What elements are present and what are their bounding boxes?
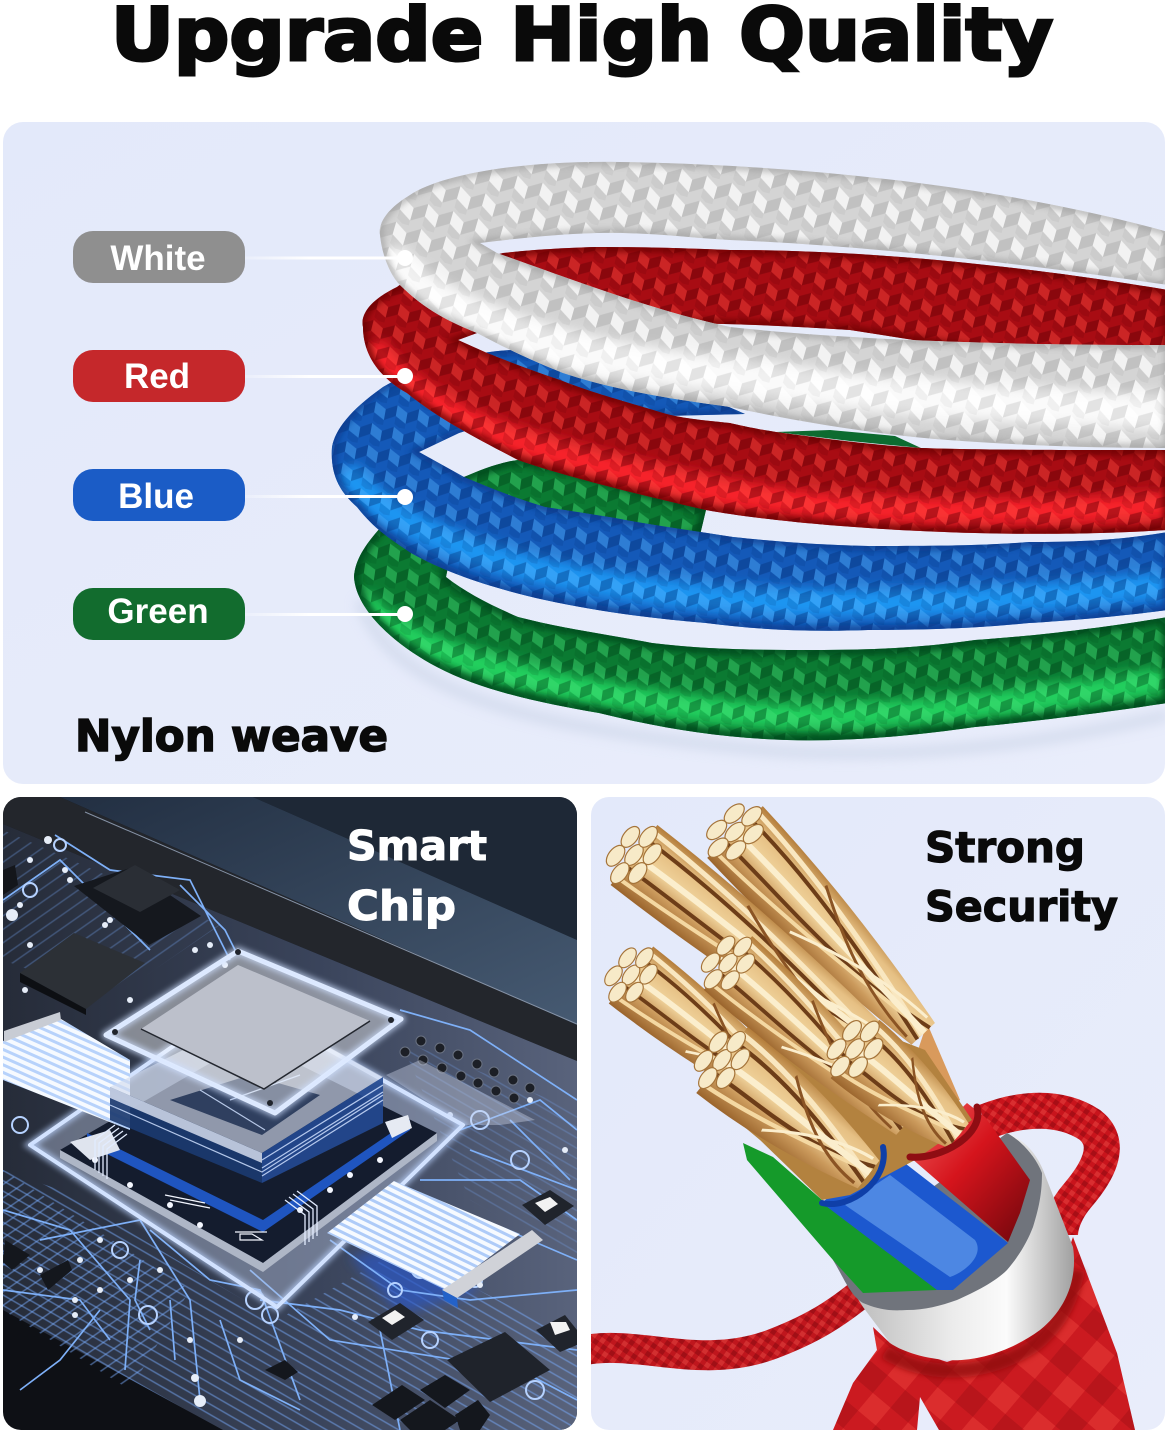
icon: dot matrix components	[400, 1036, 535, 1103]
label: Red	[73, 350, 245, 402]
icon: right glass tint	[386, 1060, 535, 1125]
cable shadow	[360, 600, 1168, 754]
circuit traces	[3, 835, 577, 1430]
cable: green	[354, 460, 1168, 740]
label: Blue	[73, 469, 245, 521]
icon: silver sleeve	[833, 1133, 1074, 1360]
icon: glowing ribbons	[3, 1012, 543, 1308]
panel: nylon weave cables	[3, 122, 1168, 784]
icon: glass lid frame	[106, 949, 401, 1113]
icon: base chip	[60, 1064, 437, 1272]
heading: Strong Security	[925, 823, 1118, 931]
heading: Smart Chip: Chip	[347, 882, 456, 930]
label: Red: Red	[124, 357, 190, 396]
label: Green	[73, 588, 245, 640]
fine contact legs	[95, 1125, 317, 1245]
panel: strong security	[585, 793, 1165, 1430]
cable: blue	[332, 350, 1168, 631]
icon: copper bundles	[604, 803, 969, 1188]
label: Blue: Blue	[118, 477, 194, 516]
cable: sliver of green behind	[776, 430, 921, 448]
icon: lower components	[3, 1190, 577, 1430]
icon: lower glass frame	[30, 1000, 463, 1307]
icon: sleeve opening	[833, 1133, 1042, 1310]
panel: smart chip	[3, 797, 577, 1430]
label: White	[73, 231, 245, 283]
cable: white	[380, 162, 1168, 448]
heading: Smart Chip	[347, 822, 487, 930]
icon: black components	[3, 865, 201, 1015]
callout leader lines	[245, 250, 413, 622]
icon: copper mass	[745, 1041, 972, 1200]
icon: wire mouth rings	[822, 1107, 978, 1204]
cable: red thin loop	[585, 1111, 1102, 1355]
cable: red braided main	[833, 1237, 1135, 1430]
circuit pads	[6, 836, 568, 1407]
heading: Strong Security: Strong	[925, 823, 1085, 872]
cable: red	[362, 247, 1168, 534]
icon: inner wires	[743, 1023, 1030, 1293]
icon: chip stack	[94, 1048, 384, 1245]
dense trace fields	[3, 830, 577, 1430]
heading: Nylon weave: Nylon weave	[75, 711, 388, 762]
label: White: White	[110, 239, 206, 278]
heading: Smart Chip: Smart	[347, 822, 487, 870]
heading: Strong Security: Security	[925, 882, 1118, 931]
label: Green: Green	[107, 592, 209, 631]
